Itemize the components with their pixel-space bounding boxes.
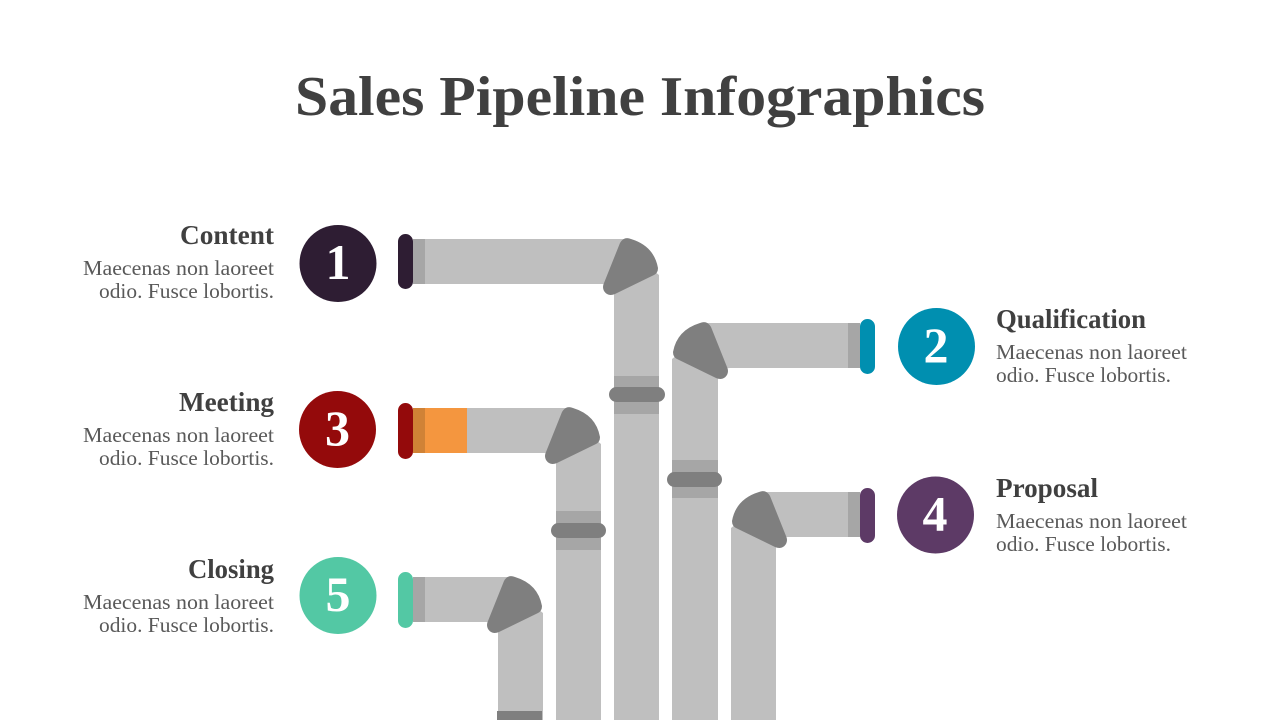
icon: number circle 4 xyxy=(897,476,974,554)
panel: step 3 meeting text: Meeting xyxy=(179,387,274,417)
panel: step 5 closing text: Closing xyxy=(188,554,274,584)
panel: step 2 qualification text: Maecenas non laoreet xyxy=(996,340,1187,364)
pipe 2: qualification xyxy=(667,319,875,720)
panel: step 3 meeting text xyxy=(83,387,274,470)
panel: step 4 proposal text xyxy=(996,473,1187,556)
panel: step 4 proposal text: odio. Fusce lobortis. xyxy=(996,532,1171,556)
panel: step 2 qualification text xyxy=(996,304,1187,387)
panel: step 1 content text: odio. Fusce lobortis. xyxy=(99,279,274,303)
icon: number circle 1 xyxy=(300,225,376,302)
icon: number circle 3 xyxy=(299,391,376,468)
icon: number circle 2 xyxy=(898,308,975,385)
panel: step 3 meeting text: Maecenas non laoreet xyxy=(83,423,274,447)
pipe 5: closing xyxy=(398,572,543,720)
pipe 4: proposal xyxy=(731,488,875,720)
panel: step 5 closing text xyxy=(83,554,274,637)
title: Sales Pipeline Infographics xyxy=(295,66,985,128)
icon: number circle 5: 5 xyxy=(326,566,350,622)
icon: number circle 3: 3 xyxy=(325,400,350,456)
panel: step 3 meeting text: odio. Fusce lobortis. xyxy=(99,446,274,470)
icon: number circle 4: 4 xyxy=(922,486,948,542)
panel: step 1 content text xyxy=(83,220,274,303)
panel: step 5 closing text: odio. Fusce lobortis. xyxy=(99,613,274,637)
panel: step 4 proposal text: Proposal xyxy=(996,473,1098,503)
pipe 1: content xyxy=(398,234,665,720)
panel: step 2 qualification text: Qualification xyxy=(996,304,1146,334)
panel: step 5 closing text: Maecenas non laoreet xyxy=(83,590,274,614)
pipe 3: meeting xyxy=(398,403,606,720)
panel: step 2 qualification text: odio. Fusce lobortis. xyxy=(996,363,1171,387)
panel: step 1 content text: Content xyxy=(180,220,274,250)
panel: step 4 proposal text: Maecenas non laoreet xyxy=(996,509,1187,533)
panel: step 1 content text: Maecenas non laoreet xyxy=(83,256,274,280)
icon: number circle 2: 2 xyxy=(924,317,948,373)
icon: number circle 1: 1 xyxy=(326,234,350,290)
icon: number circle 5 xyxy=(300,557,376,634)
